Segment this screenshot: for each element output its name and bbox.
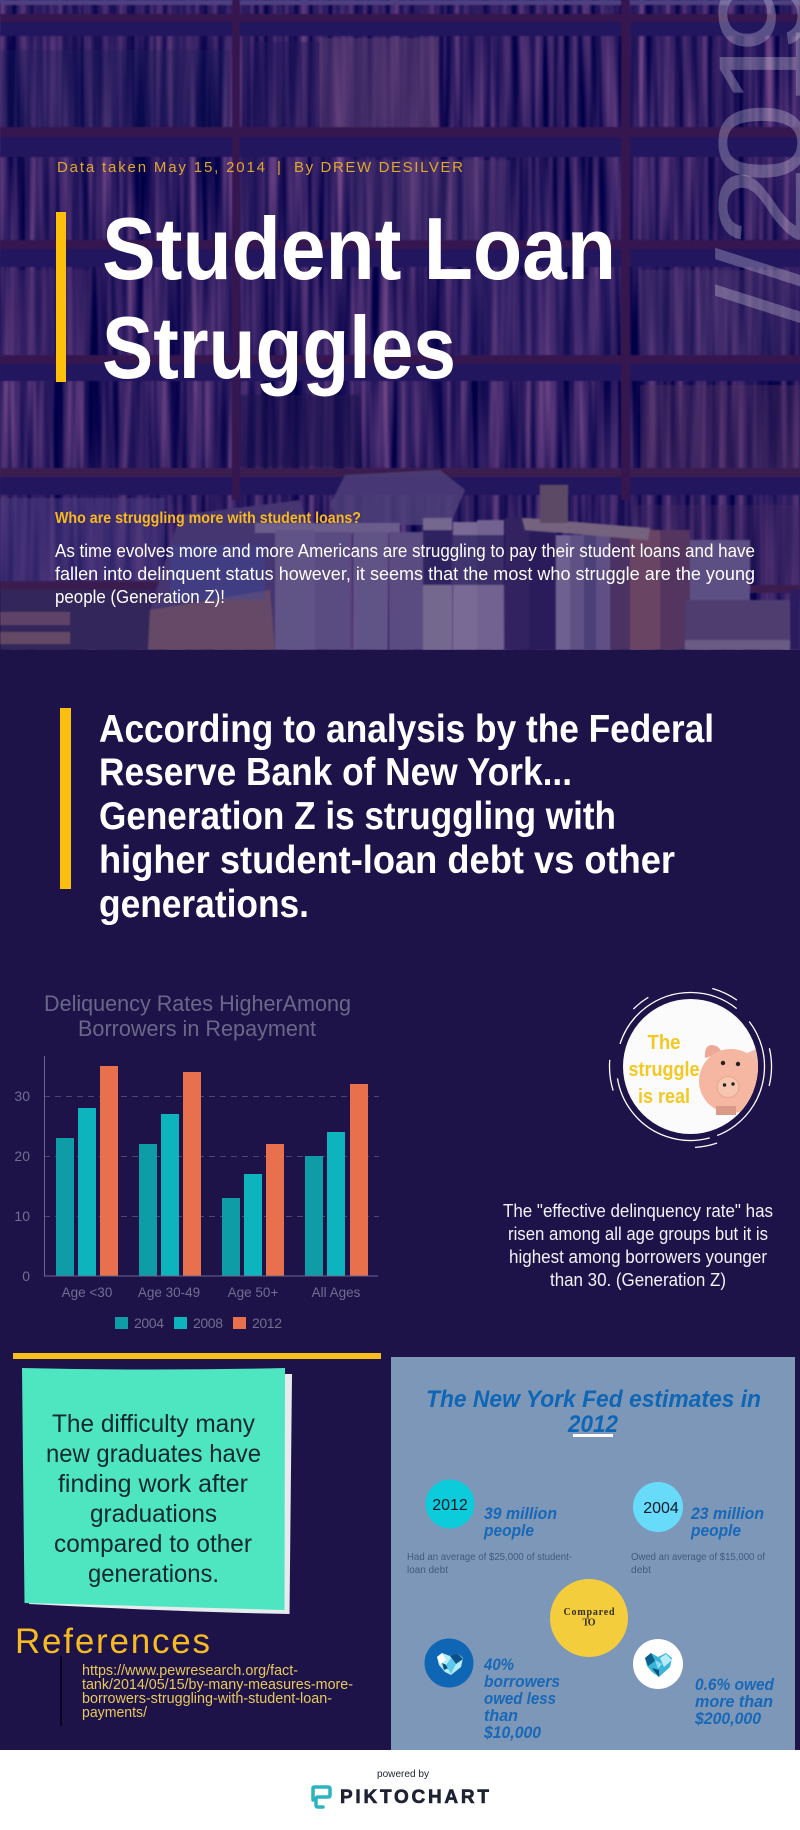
note: 2004 average debt (631, 1551, 765, 1576)
y axis labels: 20 (14, 1148, 30, 1164)
sticky note text (46, 1410, 261, 1588)
badge text: is real (638, 1086, 690, 1108)
panel heading (426, 1386, 761, 1438)
hero panel: bookshelf background (0, 0, 800, 650)
stat: 23 million people: 23 million (690, 1504, 764, 1523)
section heading: Generation Z is struggling with (99, 795, 616, 838)
intro question: Who are struggling more with student loans? (55, 510, 361, 527)
sticky note text: finding work after (58, 1470, 248, 1498)
badge text (628, 1032, 700, 1108)
circle: compared to (550, 1579, 628, 1657)
stat: 39 million people: people (483, 1521, 534, 1540)
stat: 40% borrowers: than (484, 1706, 518, 1725)
icon: heart on blue circle (424, 1638, 474, 1688)
chart title: Deliquency Rates HigherAmong (44, 991, 351, 1016)
references divider (60, 1656, 62, 1726)
chart title (44, 991, 351, 1041)
footer (0, 1750, 800, 1830)
stat: 39 million people: 39 million (484, 1504, 557, 1523)
note: 2012 average debt: Had an average of $25,000 of student- (407, 1551, 572, 1563)
stat: 40% borrowers: 40% (483, 1655, 514, 1674)
bar chart: delinquency rates (14, 1056, 379, 1331)
stat: 39 million people (483, 1504, 557, 1540)
sticky note text: new graduates have (46, 1440, 261, 1468)
sticky note text: The difficulty many (52, 1410, 255, 1438)
circle: compared to: TO (582, 1618, 596, 1628)
delinquency note: risen among all age groups but it is (508, 1224, 768, 1244)
note: 2004 average debt: Owed an average of $15,000 of (631, 1551, 765, 1563)
yellow divider (13, 1353, 381, 1359)
stat: 0.6% owed more than $200,000: 0.6% owed (695, 1675, 775, 1694)
x axis labels: Age 50+ (228, 1285, 278, 1300)
powered by: powered by (377, 1769, 429, 1780)
sticky note text: compared to other (54, 1530, 252, 1558)
byline: | (277, 159, 281, 176)
heading underline (573, 1434, 613, 1437)
title accent bar (56, 212, 66, 382)
sticky note text: graduations (90, 1500, 217, 1528)
byline: By DREW DESILVER (294, 159, 463, 176)
circle: compared to: Compared (564, 1607, 615, 1618)
y axis labels (14, 1088, 30, 1284)
x axis labels: All Ages (312, 1285, 361, 1300)
stat: 0.6% owed more than $200,000: more than (695, 1692, 773, 1711)
icon: piggy bank (699, 1045, 763, 1115)
bars: Age 30-49 (139, 1072, 201, 1276)
panel heading: The New York Fed estimates in (426, 1386, 761, 1413)
chart legend (115, 1315, 282, 1331)
byline: Data taken May 15, 2014 (57, 159, 265, 176)
intro paragraph (55, 541, 755, 607)
delinquency note: than 30. (Generation Z) (550, 1270, 726, 1290)
chart legend: 2008 (193, 1315, 223, 1331)
stat: 40% borrowers (483, 1655, 560, 1742)
intro paragraph: people (Generation Z)! (55, 587, 225, 607)
stat: 40% borrowers: $10,000 (483, 1723, 542, 1742)
note: 2012 average debt (407, 1551, 572, 1576)
references link: tank/2014/05/15/by-many-measures-more- (82, 1677, 353, 1693)
references heading: References (15, 1622, 210, 1661)
panel: New York Fed estimates (391, 1357, 795, 1750)
circle: 2004 (633, 1482, 683, 1532)
Piktochart wordmark: PIKTOCHART (340, 1787, 489, 1808)
stat: 0.6% owed more than $200,000 (694, 1675, 775, 1728)
section heading: Reserve Bank of New York... (99, 751, 572, 794)
chart legend: 2012 (252, 1315, 282, 1331)
circle: 2012 (426, 1480, 474, 1528)
badge: the struggle is real piggy bank (608, 988, 772, 1148)
references link (82, 1663, 353, 1721)
circle: 2004: 2004 (643, 1500, 679, 1517)
title: Struggles (102, 298, 456, 397)
intro paragraph: fallen into delinquent status however, it seems that the most who struggle are the young (55, 564, 755, 584)
icon: heart on white circle (633, 1639, 683, 1689)
title (102, 199, 616, 397)
y axis labels: 0 (22, 1268, 30, 1284)
sticky note (22, 1368, 292, 1614)
x axis labels: Age 30-49 (138, 1285, 200, 1300)
intro paragraph: As time evolves more and more Americans are struggling to pay their student loans and have (55, 541, 755, 561)
note: 2012 average debt: loan debt (407, 1564, 448, 1576)
heading accent bar (60, 708, 71, 889)
references link: borrowers-struggling-with-student-loan- (82, 1691, 332, 1707)
icon: Piktochart logo (313, 1787, 330, 1807)
references link: https://www.pewresearch.org/fact- (82, 1663, 298, 1679)
references link: payments/ (82, 1705, 148, 1721)
chart title: Borrowers in Repayment (78, 1016, 316, 1041)
icon: decorative rings (587, 963, 794, 1170)
panel heading: 2012 (567, 1411, 619, 1438)
y axis labels: 30 (14, 1088, 30, 1104)
section heading: According to analysis by the Federal (99, 708, 714, 751)
stat: 23 million people: people (690, 1521, 741, 1540)
bars: Age 50+ (222, 1144, 284, 1276)
delinquency note (503, 1201, 773, 1290)
stat: 23 million people (690, 1504, 764, 1540)
delinquency note: The "effective delinquency rate" has (503, 1201, 773, 1221)
bars: All Ages (305, 1084, 368, 1276)
byline (57, 159, 463, 176)
section heading: generations. (99, 883, 309, 926)
stat: 40% borrowers: borrowers (484, 1672, 560, 1691)
y axis labels: 10 (14, 1208, 30, 1224)
badge text: The (648, 1032, 680, 1054)
badge text: struggle (628, 1059, 700, 1081)
bars: Age under 30 (56, 1066, 118, 1276)
section heading (99, 708, 714, 926)
title: Student Loan (102, 199, 616, 298)
x axis labels (62, 1285, 361, 1300)
delinquency note: highest among borrowers younger (509, 1247, 767, 1267)
note: 2004 average debt: debt (631, 1564, 651, 1576)
sticky note text: generations. (88, 1560, 219, 1588)
stat: 40% borrowers: owed less (484, 1689, 556, 1708)
chart legend: 2004 (134, 1315, 164, 1331)
section heading: higher student-loan debt vs other (99, 839, 675, 882)
stat: 0.6% owed more than $200,000: $200,000 (694, 1709, 762, 1728)
circle: 2012: 2012 (432, 1497, 468, 1514)
x axis labels: Age <30 (62, 1285, 112, 1300)
